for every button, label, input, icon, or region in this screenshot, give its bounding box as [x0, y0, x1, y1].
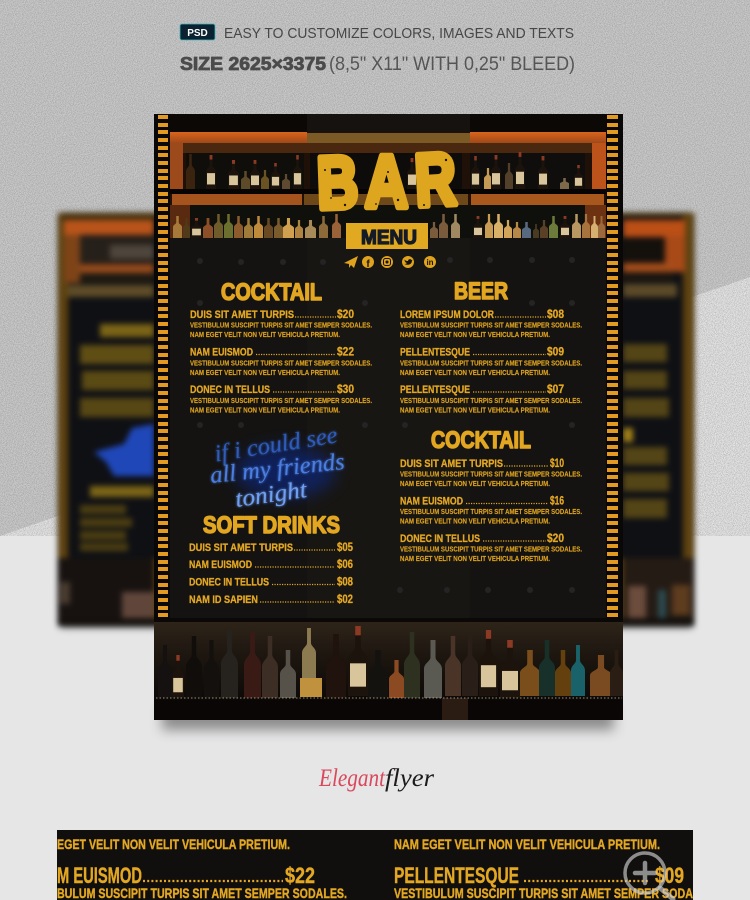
heading: soft drinks: SOFT DRINKS — [203, 512, 340, 539]
left orange film strip — [154, 114, 170, 620]
item 2: NAM EUISMOD — [190, 346, 253, 358]
cocktail 2: VESTIBULUM SUSCIPIT TURPIS SIT AMET SEMPER SODALES. — [400, 507, 582, 516]
icon: instagram — [381, 256, 393, 268]
beer 2 — [400, 344, 582, 377]
badge: PSD: PSD — [187, 28, 208, 39]
item 2: VESTIBULUM SUSCIPIT TURPIS SIT AMET SEMPER SODALES. — [190, 358, 372, 368]
drink 3: $08 — [337, 574, 353, 588]
right column: beer — [400, 278, 582, 414]
item 1 — [190, 307, 372, 339]
drink 1: $05 — [337, 540, 353, 554]
drink 4: NAM ID SAPIEN — [189, 594, 258, 606]
cocktail 1: $10 — [550, 456, 564, 470]
beer 3 — [400, 382, 582, 414]
front flyer shadow — [162, 708, 614, 730]
item 3: VESTIBULUM SUSCIPIT TURPIS SIT AMET SEMPER SODALES. — [190, 396, 372, 405]
social icons — [344, 256, 436, 270]
bottles: lower shelf — [173, 214, 605, 238]
drink 2: NAM EUISMOD — [189, 559, 252, 571]
item 1: NAM EGET VELIT NON VELIT VEHICULA PRETIUM. — [190, 330, 340, 339]
heading: cocktail: COCKTAIL — [221, 279, 322, 306]
drink 1 — [189, 540, 353, 554]
item 1: VESTIBULUM SUSCIPIT TURPIS SIT AMET SEMPER SODALES. — [190, 320, 372, 330]
bottles: upper shelf — [186, 152, 583, 189]
header: size: SIZE 2625×3375 — [180, 54, 326, 74]
left column: cocktail — [190, 279, 372, 414]
icon: magnifier — [625, 853, 673, 899]
beer 1: $08 — [547, 307, 564, 321]
beer 2: VESTIBULUM SUSCIPIT TURPIS SIT AMET SEMPER SODALES. — [400, 358, 582, 368]
right orange film strip — [606, 114, 623, 620]
beer 1: NAM EGET VELIT NON VELIT VEHICULA PRETIUM. — [400, 330, 550, 339]
item 2: $22 — [337, 344, 354, 358]
cocktail 3: $20 — [547, 531, 564, 545]
beer 3: NAM EGET VELIT NON VELIT VEHICULA PRETIUM. — [400, 406, 550, 414]
cocktail 2: $16 — [550, 494, 564, 508]
heading: beer: BEER — [454, 278, 508, 305]
preview left text — [57, 836, 347, 900]
beer 3: VESTIBULUM SUSCIPIT TURPIS SIT AMET SEMPER SODALES. — [400, 396, 582, 405]
cocktail 3: VESTIBULUM SUSCIPIT TURPIS SIT AMET SEMPER SODALES. — [400, 544, 582, 554]
beer 1 — [400, 307, 582, 339]
title: BAR: B — [315, 140, 359, 225]
item 3: DONEC IN TELLUS — [190, 384, 270, 396]
menu panel background — [170, 238, 606, 618]
cocktail 2: NAM EUISMOD — [400, 496, 463, 508]
beer 2: PELLENTESQUE — [400, 346, 470, 358]
header: size: (8,5" X11" WITH 0,25" BLEED) — [329, 54, 575, 75]
beer 2: NAM EGET VELIT NON VELIT VEHICULA PRETIUM. — [400, 368, 550, 377]
item 3: NAM EGET VELIT NON VELIT VEHICULA PRETIUM. — [190, 406, 340, 414]
bottom bottle photo — [154, 622, 623, 720]
icon: facebook: f — [366, 259, 370, 270]
neon sign: all my friends — [209, 449, 346, 489]
title: BAR: A — [365, 140, 408, 223]
preview right text — [394, 836, 693, 900]
blurred back flyer — [58, 213, 694, 628]
neon sign: if i could see — [213, 422, 340, 468]
logo: elegantflyer: flyer — [385, 765, 434, 792]
bottom zoom preview — [57, 830, 693, 900]
cocktail 2: NAM EGET VELIT NON VELIT VEHICULA PRETIUM. — [400, 516, 550, 526]
logo: elegantflyer: Elegant — [318, 765, 386, 792]
beer 1: VESTIBULUM SUSCIPIT TURPIS SIT AMET SEMPER SODALES. — [400, 320, 582, 330]
preview right text: $09 — [655, 863, 684, 888]
beer 1: LOREM IPSUM DOLOR — [400, 309, 494, 321]
item 3 — [190, 382, 372, 414]
beer 2: $09 — [547, 344, 564, 358]
cocktail 3: NAM EGET VELIT NON VELIT VEHICULA PRETIUM. — [400, 554, 550, 563]
menu label: MENU — [361, 227, 417, 249]
header: size — [180, 54, 575, 75]
title: BAR: R — [413, 137, 458, 222]
preview left text: $22 — [285, 863, 315, 888]
cocktail 1 — [400, 456, 582, 488]
logo: elegantflyer — [318, 765, 434, 792]
neon sign: tonight — [234, 477, 310, 513]
header line one: EASY TO CUSTOMIZE COLORS, IMAGES AND TEXTS — [224, 25, 574, 42]
shelf photo — [170, 114, 606, 238]
drink 3: DONEC IN TELLUS — [189, 576, 269, 588]
menu label — [346, 223, 428, 249]
item 2 — [190, 344, 372, 377]
icon: linkedin: in — [426, 258, 434, 267]
preview right text: PELLENTESQUE — [394, 863, 519, 888]
drink 1: DUIS SIT AMET TURPIS — [189, 542, 293, 554]
drink 3 — [189, 574, 353, 588]
icon: twitter — [402, 256, 414, 268]
drink 4: $02 — [337, 592, 353, 606]
cocktail 3: DONEC IN TELLUS — [400, 533, 480, 545]
heading: cocktail two: COCKTAIL — [431, 427, 531, 454]
beer 3: PELLENTESQUE — [400, 384, 470, 396]
title: BAR — [315, 137, 458, 225]
item 2: NAM EGET VELIT NON VELIT VEHICULA PRETIUM. — [190, 368, 340, 377]
header: psd note — [180, 24, 574, 42]
badge: PSD — [180, 24, 215, 40]
drink 4 — [189, 592, 353, 606]
cocktail 1: NAM EGET VELIT NON VELIT VEHICULA PRETIUM. — [400, 479, 550, 488]
front flyer — [154, 114, 623, 720]
preview left text: EGET VELIT NON VELIT VEHICULA PRETIUM. — [57, 836, 290, 852]
preview right text: NAM EGET VELIT NON VELIT VEHICULA PRETIUM. — [394, 836, 660, 852]
drink 2 — [189, 557, 353, 571]
cocktail 2 — [400, 494, 582, 526]
drink 2: $06 — [337, 557, 353, 571]
left column: soft drinks — [189, 512, 353, 606]
beer 3: $07 — [547, 382, 564, 396]
right column: cocktail — [400, 427, 582, 563]
cocktail 1: DUIS SIT AMET TURPIS — [400, 458, 503, 470]
item 3: $30 — [337, 382, 354, 396]
item 1: DUIS SIT AMET TURPIS — [190, 309, 294, 321]
item 1: $20 — [337, 307, 354, 321]
icon: telegram — [344, 256, 358, 268]
preview left text: M EUISMOD — [57, 863, 142, 888]
neon sign — [209, 422, 346, 513]
cocktail 1: VESTIBULUM SUSCIPIT TURPIS SIT AMET SEMPER SODALES. — [400, 470, 582, 478]
cocktail 3 — [400, 531, 582, 563]
